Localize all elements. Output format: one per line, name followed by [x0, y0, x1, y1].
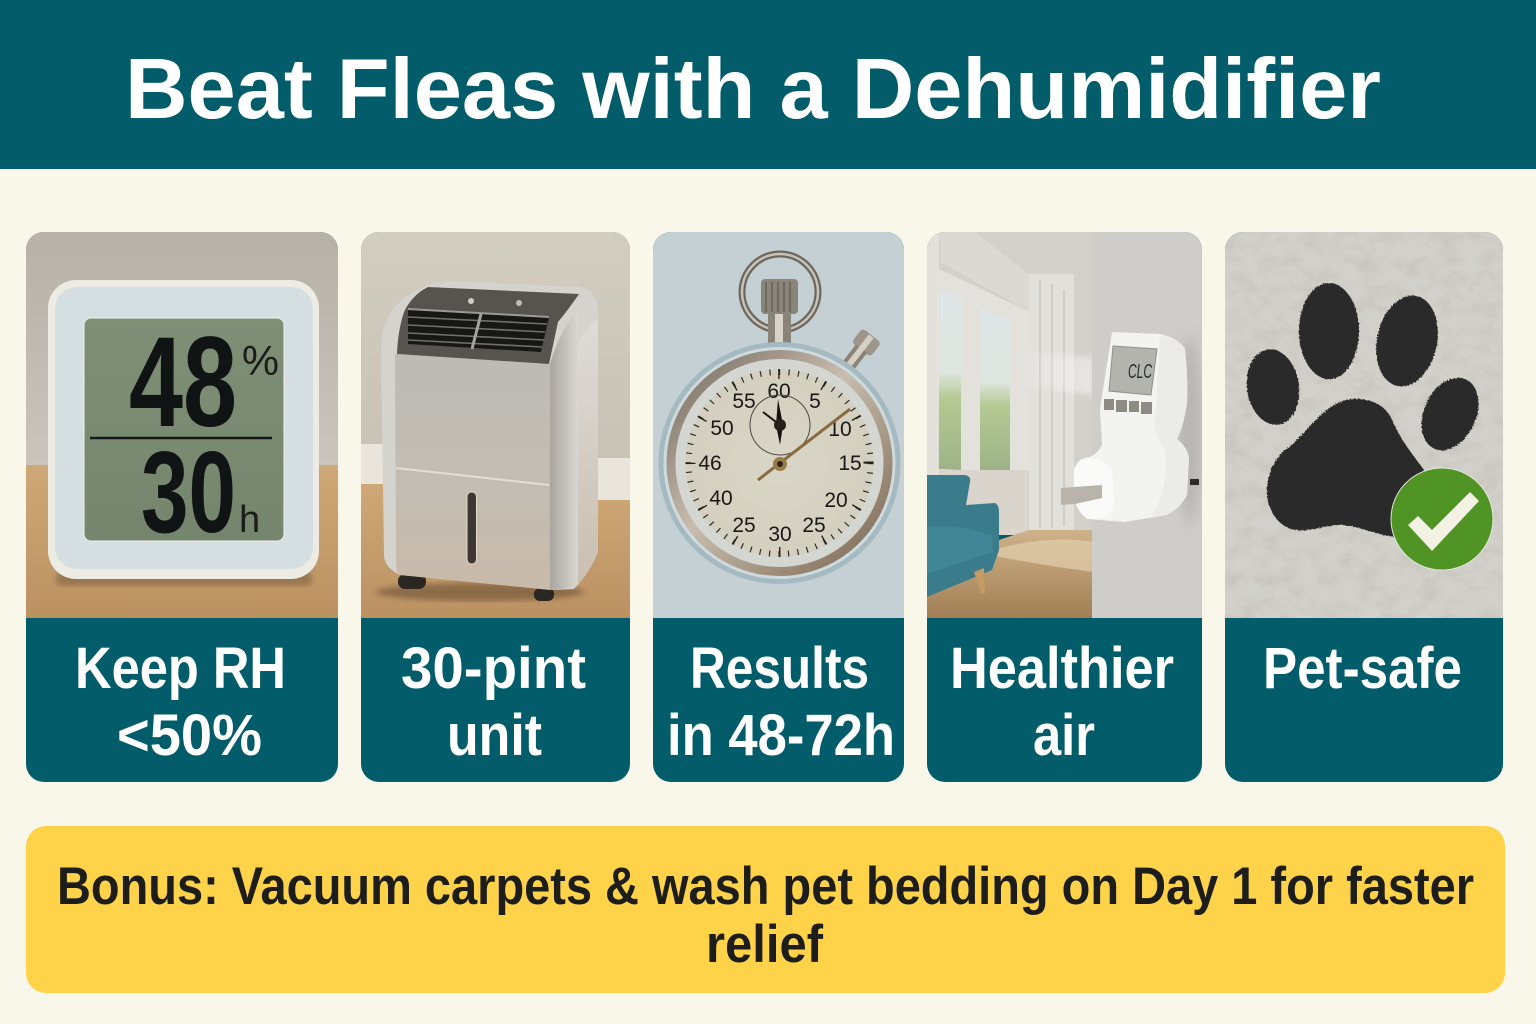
label: Pet-safe: [1263, 636, 1462, 701]
dial numbers: 5: [809, 390, 821, 413]
label: [950, 636, 1174, 768]
label: 30-pint: [401, 636, 586, 701]
label: in 48-72h: [667, 703, 895, 768]
dial numbers: 50: [710, 417, 734, 440]
photo: hygrometer: h: [239, 499, 260, 541]
photo: living room with plug-in unit: CLC: [1128, 361, 1152, 383]
armchair: [927, 475, 999, 597]
bonus text: [57, 857, 1474, 974]
panel: keep RH below 50%: [26, 232, 338, 782]
dial numbers: 46: [698, 452, 722, 475]
title: Beat Fleas with a Dehumidifier: [125, 42, 1381, 137]
dial numbers: 15: [838, 452, 862, 475]
label: air: [1033, 703, 1095, 768]
dial numbers: 10: [828, 418, 852, 441]
panel: pet-safe: [1225, 232, 1503, 782]
dial numbers: 25: [802, 514, 826, 537]
photo: stopwatch: [653, 232, 904, 618]
label: Healthier: [950, 636, 1174, 701]
header banner: [0, 0, 1536, 169]
icon: green check badge: [1391, 468, 1493, 570]
photo: hygrometer: 30: [141, 427, 236, 557]
bonus callout: [26, 826, 1505, 993]
label: [667, 636, 895, 768]
machine body: [381, 282, 598, 590]
panel: 30-pint unit: [361, 232, 630, 782]
label: <50%: [117, 703, 262, 768]
dial numbers: 20: [824, 489, 848, 512]
label: Keep RH: [75, 636, 286, 701]
photo: hygrometer: %: [242, 337, 279, 384]
label: [401, 636, 586, 768]
panel: results in 48-72h: [653, 232, 904, 782]
label: Results: [690, 636, 869, 701]
plug-in device: [1074, 332, 1189, 522]
photo: hygrometer: 48: [129, 311, 237, 454]
dial numbers: 55: [732, 390, 756, 413]
label: unit: [447, 703, 542, 768]
panel: healthier air: [927, 232, 1202, 782]
dial numbers: 30: [768, 523, 792, 546]
photo: dehumidifier: [361, 232, 630, 618]
label: [75, 636, 286, 768]
photo: living room with plug-in unit: [927, 232, 1202, 618]
bonus text: relief: [706, 915, 823, 974]
dial numbers: 25: [732, 514, 756, 537]
dial numbers: 60: [767, 380, 791, 403]
photo: hygrometer: [26, 232, 338, 618]
photo: paw print on carpet: [1225, 232, 1503, 618]
dial numbers: 40: [709, 487, 733, 510]
dial numbers: [698, 380, 862, 546]
